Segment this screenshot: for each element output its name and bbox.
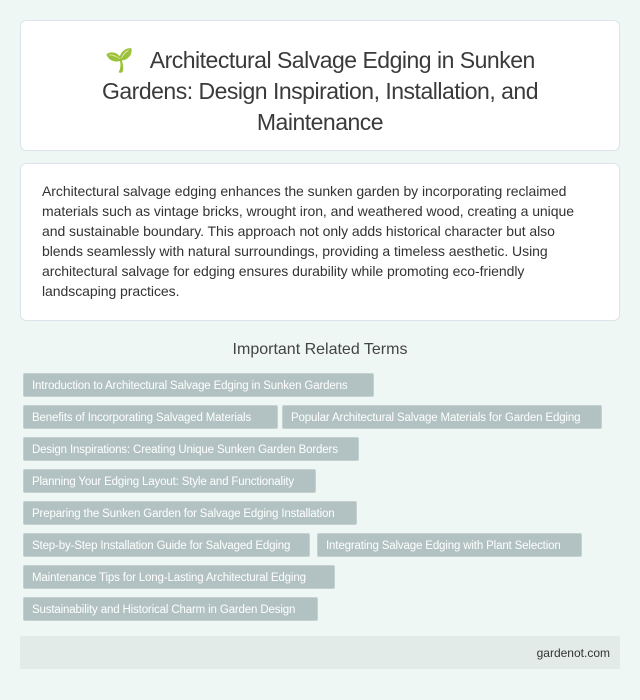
tag 4 bbox=[23, 437, 359, 461]
tag 10: Sustainability and Historical Charm in Garden Design bbox=[32, 604, 295, 616]
title card bbox=[20, 20, 620, 151]
terms heading: Important Related Terms bbox=[233, 341, 407, 358]
description text: blends seamlessly with natural surroundings, providing a timeless aesthetic. Using bbox=[42, 243, 548, 259]
tag 5: Planning Your Edging Layout: Style and Functionality bbox=[32, 476, 294, 488]
tag 7 bbox=[23, 533, 310, 557]
tag 3: Popular Architectural Salvage Materials for Garden Edging bbox=[291, 412, 580, 424]
title: 🌱 Architectural Salvage Edging in Sunken Gardens: Design Inspiration, Installation, and Maintenance bbox=[102, 47, 538, 135]
tag 3 bbox=[282, 405, 602, 429]
tag 8: Integrating Salvage Edging with Plant Selection bbox=[326, 540, 561, 552]
tag 6 bbox=[23, 501, 357, 525]
tag 2 bbox=[23, 405, 278, 429]
tag 10 bbox=[23, 597, 318, 621]
tag 1: Introduction to Architectural Salvage Edging in Sunken Gardens bbox=[32, 380, 347, 392]
tag 4: Design Inspirations: Creating Unique Sunken Garden Borders bbox=[32, 444, 338, 456]
description text: and sustainable boundary. This approach not only adds historical character but also bbox=[42, 223, 555, 239]
description text: architectural salvage for edging ensures durability while promoting eco-friendly bbox=[42, 263, 524, 279]
tag 9 bbox=[23, 565, 335, 589]
tag 7: Step-by-Step Installation Guide for Salvaged Edging bbox=[32, 540, 290, 552]
tag 6: Preparing the Sunken Garden for Salvage Edging Installation bbox=[32, 508, 334, 520]
tag 1 bbox=[23, 373, 374, 397]
tag 2: Benefits of Incorporating Salvaged Materials bbox=[32, 412, 251, 424]
tag 8 bbox=[317, 533, 582, 557]
description text bbox=[42, 183, 574, 299]
description text: landscaping practices. bbox=[42, 283, 179, 299]
description text: materials such as vintage bricks, wrought iron, and weathered wood, creating a unique bbox=[42, 203, 574, 219]
footer text: gardenot.com bbox=[537, 646, 610, 660]
description text: Architectural salvage edging enhances the sunken garden by incorporating reclaimed bbox=[42, 183, 566, 199]
tag 5 bbox=[23, 469, 316, 493]
footer bbox=[20, 636, 620, 669]
tag 9: Maintenance Tips for Long-Lasting Architectural Edging bbox=[32, 572, 306, 584]
description card bbox=[20, 163, 620, 321]
